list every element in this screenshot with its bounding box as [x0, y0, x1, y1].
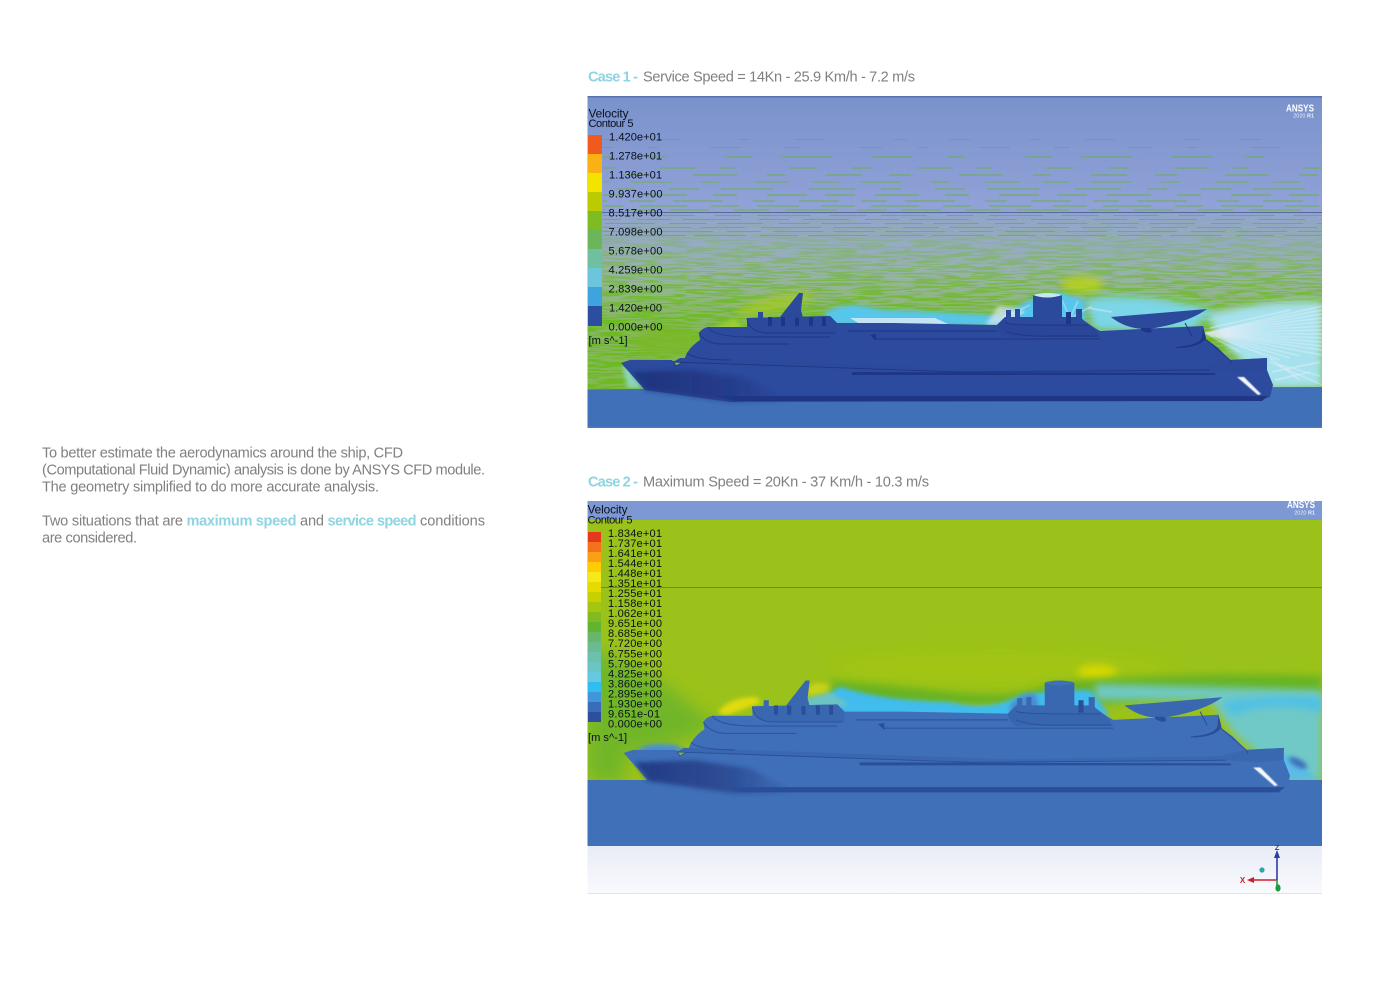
green flow field: [588, 520, 1322, 782]
legend: velocity scale, case 2: [588, 502, 662, 744]
ship model, case 1: [621, 293, 1273, 402]
legend: velocity scale, case 1: 4.259e+00: [608, 264, 662, 276]
wake: flow separation above ship: [638, 684, 1322, 780]
legend: velocity scale, case 1: Velocity: [588, 106, 629, 120]
legend: velocity scale, case 2: 1.351e+01: [608, 578, 662, 590]
text block: CFD introduction: [42, 446, 485, 546]
legend: velocity scale, case 1: 0.000e+00: [608, 322, 662, 334]
logo: ANSYS: [1287, 501, 1315, 514]
legend: velocity scale, case 2: 6.755e+00: [608, 648, 662, 660]
text block: CFD introduction: conditions: [420, 514, 485, 530]
icon: XYZ axis triad: X: [1240, 876, 1246, 885]
legend: velocity scale, case 1: [588, 106, 662, 347]
legend: velocity scale, case 2: 1.062e+01: [608, 608, 662, 620]
logo: ANSYS: ANSYS: [1287, 499, 1315, 511]
legend: velocity scale, case 1: 2.839e+00: [608, 284, 662, 296]
legend: velocity scale, case 2: 1.448e+01: [608, 568, 662, 580]
legend: velocity scale, case 2: 1.158e+01: [608, 598, 662, 610]
wake: flow separation above ship: [622, 276, 1322, 388]
flow field shading: [588, 650, 1322, 782]
legend: velocity scale, case 1: [m s^-1]: [588, 335, 628, 347]
legend: velocity scale, case 2: 9.651e+00: [608, 618, 662, 630]
logo: ANSYS: 2020 R1: [1293, 114, 1314, 120]
legend: velocity scale, case 2: 1.641e+01: [608, 548, 662, 560]
panel: case 2 velocity contour: [588, 499, 1322, 894]
ship model, case 2: [624, 681, 1290, 793]
legend: velocity scale, case 2: 5.790e+00: [608, 658, 662, 670]
legend: velocity scale, case 1: 8.517e+00: [608, 208, 662, 220]
logo: ANSYS: [1286, 104, 1314, 118]
panel: case 1 velocity contour: [587, 96, 1323, 428]
icon: XYZ axis triad: [1240, 843, 1281, 892]
legend: velocity scale, case 1: 1.420e+00: [609, 302, 662, 314]
legend: velocity scale, case 2: 7.720e+00: [608, 638, 662, 650]
logo: ANSYS: ANSYS: [1286, 102, 1314, 114]
legend: velocity scale, case 2: Velocity: [588, 502, 628, 516]
heading: case 1: Case 1 -: [588, 70, 638, 86]
legend: velocity scale, case 1: 7.098e+00: [608, 226, 662, 238]
legend: velocity scale, case 2: 1.544e+01: [608, 558, 662, 570]
text block: CFD introduction: The geometry simplified to do more accurate analysis.: [42, 480, 379, 496]
legend: velocity scale, case 2: 3.860e+00: [608, 678, 662, 690]
legend: velocity scale, case 1: 1.136e+01: [609, 170, 662, 182]
logo: ANSYS: 2020 R1: [1294, 510, 1315, 516]
legend: velocity scale, case 2: [m s^-1]: [588, 732, 627, 744]
legend: velocity scale, case 2: 9.651e-01: [608, 709, 660, 721]
sea floor: [588, 780, 1322, 846]
text block: CFD introduction: and: [300, 514, 324, 530]
legend: velocity scale, case 2: 1.834e+01: [608, 528, 662, 540]
text block: CFD introduction: (Computational Fluid Dynamic) analysis is done by ANSYS CFD module.: [42, 462, 485, 478]
legend: velocity scale, case 2: 1.737e+01: [608, 538, 662, 550]
legend: velocity scale, case 1: Contour 5: [588, 118, 634, 130]
legend: velocity scale, case 2: 8.685e+00: [608, 628, 662, 640]
legend: velocity scale, case 2: 0.000e+00: [608, 719, 662, 731]
text block: CFD introduction: service speed: [328, 514, 416, 530]
sky band: [588, 501, 1322, 521]
sky background: [588, 98, 1322, 390]
heading: case 1: Service Speed = 14Kn - 25.9 Km/h - 7.2 m/s: [643, 70, 915, 86]
legend: velocity scale, case 2: 2.895e+00: [608, 688, 662, 700]
legend: velocity scale, case 1: 9.937e+00: [608, 188, 662, 200]
heading: case 2: Maximum Speed = 20Kn - 37 Km/h - 10.3 m/s: [643, 474, 929, 490]
dense velocity streaks: [587, 205, 1323, 390]
sparse velocity streaks: [603, 140, 1322, 236]
text block: CFD introduction: To better estimate the aerodynamics around the ship, CFD: [42, 446, 403, 462]
text block: CFD introduction: maximum speed: [186, 514, 296, 530]
heading: case 2: Case 2 -: [588, 474, 638, 490]
icon: XYZ axis triad: Z: [1275, 843, 1280, 852]
sea floor: [588, 387, 1322, 428]
legend: velocity scale, case 2: Contour 5: [588, 514, 632, 526]
legend: velocity scale, case 1: 5.678e+00: [608, 246, 662, 258]
text block: CFD introduction: Two situations that are: [42, 514, 183, 530]
legend: velocity scale, case 2: 1.930e+00: [608, 698, 662, 710]
legend: velocity scale, case 1: 1.420e+01: [609, 132, 662, 144]
green flow haze: [588, 205, 1322, 390]
legend: velocity scale, case 1: 1.278e+01: [609, 150, 662, 162]
wake: fanned white streamlines at stern: [1000, 300, 1322, 385]
legend: velocity scale, case 2: 1.255e+01: [608, 588, 662, 600]
text block: CFD introduction: are considered.: [42, 530, 137, 546]
legend: velocity scale, case 2: 4.825e+00: [608, 668, 662, 680]
bottom band: [588, 846, 1322, 888]
